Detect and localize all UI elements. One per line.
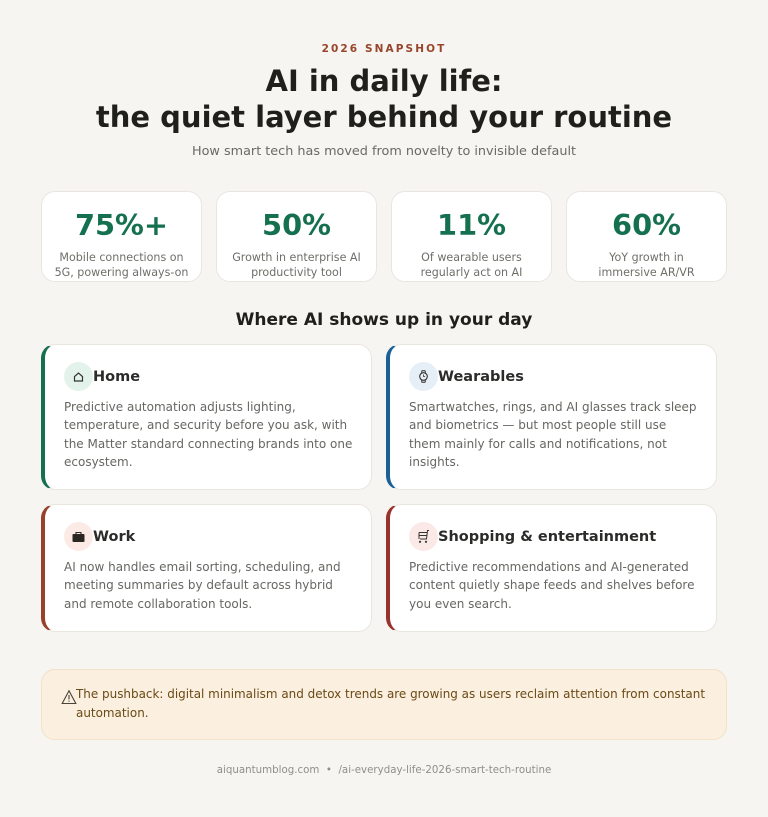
stat card: 75%+ bbox=[41, 191, 202, 282]
section heading: Where AI shows up in your day bbox=[236, 310, 532, 330]
stat card: 60% bbox=[566, 191, 727, 282]
stat card: 75%+: Mobile connections on 5G, powering always-on bbox=[55, 251, 188, 279]
stat card: 50% bbox=[216, 191, 377, 282]
text: shopping and entertainment: Predictive recommendations and AI-generated content quietly shape feeds and shelves before you even search. bbox=[409, 560, 694, 611]
heading: shopping and entertainment: Shopping & entertainment bbox=[438, 528, 656, 544]
title: AI in daily life: bbox=[266, 64, 502, 98]
stat card: 60%: YoY growth in immersive AR/VR bbox=[598, 251, 695, 279]
icon: briefcase bbox=[64, 522, 93, 551]
icon: home bbox=[64, 362, 93, 391]
stat card: 60%: 60% bbox=[612, 208, 681, 242]
title: the quiet layer behind your routine bbox=[96, 100, 672, 134]
text: work: AI now handles email sorting, scheduling, and meeting summaries by default across hybrid and remote collaboration tools. bbox=[64, 560, 341, 611]
title bbox=[96, 64, 672, 134]
stat card: 11% bbox=[391, 191, 552, 282]
footer: aiquantumblog.com • /ai-everyday-life-2026-smart-tech-routine bbox=[217, 764, 551, 776]
heading: work: Work bbox=[93, 528, 135, 544]
icon: watch bbox=[409, 362, 438, 391]
icon: warning bbox=[61, 690, 77, 704]
callout text: The pushback: digital minimalism and detox trends are growing as users reclaim attention from constant automation. bbox=[76, 686, 705, 720]
text: wearables: Smartwatches, rings, and AI glasses track sleep and biometrics — but most people still use them mainly for calls and notifications, not insights. bbox=[409, 400, 697, 469]
callout: pushback bbox=[41, 669, 727, 740]
stat card: 50%: Growth in enterprise AI productivity tool bbox=[232, 251, 361, 279]
panel: work bbox=[41, 504, 372, 632]
stat card: 50%: 50% bbox=[262, 208, 331, 242]
icon: cart bbox=[409, 522, 438, 551]
eyebrow label: 2026 SNAPSHOT bbox=[322, 42, 446, 54]
stat card: 75%+: 75%+ bbox=[75, 208, 168, 242]
text: home: Predictive automation adjusts lighting, temperature, and security before you ask, with the Matter standard connecting brands into one ecosystem. bbox=[64, 400, 352, 469]
heading: wearables: Wearables bbox=[438, 368, 524, 384]
panel: shopping and entertainment bbox=[386, 504, 717, 632]
subtitle: How smart tech has moved from novelty to invisible default bbox=[192, 144, 576, 159]
stat card: 11%: 11% bbox=[437, 208, 506, 242]
panel: home bbox=[41, 344, 372, 490]
heading: home: Home bbox=[93, 368, 140, 384]
panel: wearables bbox=[386, 344, 717, 490]
stat card: 11%: Of wearable users regularly act on AI bbox=[421, 251, 522, 279]
